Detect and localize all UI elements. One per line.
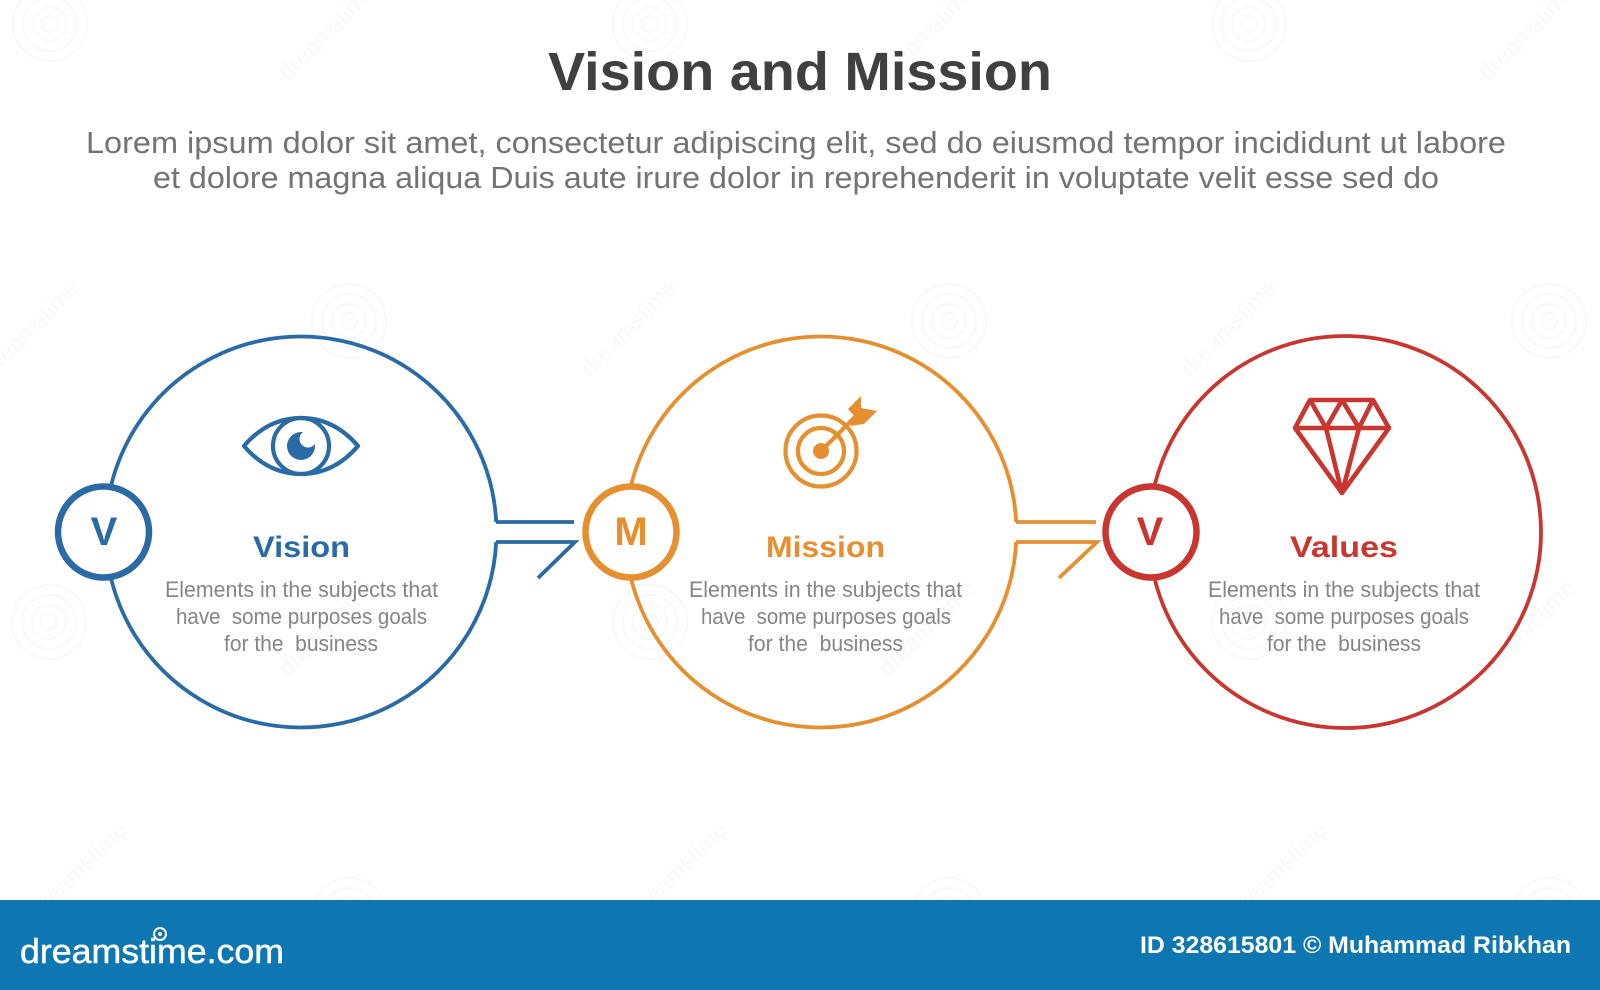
text: dreamstime — [625, 816, 733, 924]
heading: vision: Vision — [253, 531, 350, 564]
footer logo: dreamstime.com — [20, 933, 284, 971]
badge: V — [58, 486, 149, 578]
values ring — [1149, 336, 1541, 728]
panel: vision — [58, 337, 575, 728]
panel: values — [1106, 336, 1541, 728]
description: mission — [689, 577, 962, 656]
text: dreamstime — [1175, 274, 1283, 382]
icon: eye — [244, 418, 358, 474]
text: dreamstime — [1473, 574, 1581, 682]
description: values: have some purposes goals — [1219, 604, 1469, 629]
heading: values: Values — [1290, 531, 1398, 564]
subtitle text block: Lorem ipsum dolor sit amet, consectetur adipiscing elit, sed do eiusmod tempor incididunt ut labore — [86, 125, 1506, 160]
description: mission: Elements in the subjects that — [689, 577, 962, 602]
description: values: Elements in the subjects that — [1208, 577, 1480, 602]
subtitle text block: et dolore magna aliqua Duis aute irure dolor in reprehenderit in voluptate velit esse sed do — [153, 160, 1439, 195]
text: dreamstime — [575, 274, 683, 382]
text: dreamstime — [1225, 816, 1333, 924]
description: vision: have some purposes goals — [176, 604, 427, 629]
badge: V — [1106, 486, 1196, 578]
title: Vision and Mission — [548, 42, 1052, 102]
description: values — [1208, 577, 1480, 656]
mission ring — [625, 337, 1016, 728]
vision ring — [105, 337, 496, 728]
badge: M: M — [614, 510, 648, 554]
description: mission: have some purposes goals — [701, 604, 951, 629]
description: vision: for the business — [224, 631, 378, 656]
heading: mission: Mission — [766, 531, 885, 564]
footer credit: ID 328615801 © Muhammad Ribkhan — [1140, 932, 1571, 959]
text: dreamstime — [273, 574, 381, 682]
description: vision: Elements in the subjects that — [165, 577, 438, 602]
arrow: vision to mission — [496, 522, 575, 578]
description: vision — [165, 577, 438, 656]
badge: V: V — [91, 510, 118, 554]
badge: V: V — [1137, 510, 1164, 554]
description: values: for the business — [1267, 631, 1421, 656]
badge: M — [586, 486, 676, 578]
text: dreamstime — [25, 816, 133, 924]
footer bar — [0, 900, 1600, 990]
arrow: mission to values — [1016, 522, 1097, 578]
subtitle text block — [86, 125, 1506, 195]
description: mission: for the business — [748, 631, 903, 656]
icon: diamond — [1295, 400, 1389, 493]
icon: target with arrow — [786, 396, 877, 486]
panel: mission — [586, 337, 1097, 728]
text: dreamstime — [873, 574, 981, 682]
